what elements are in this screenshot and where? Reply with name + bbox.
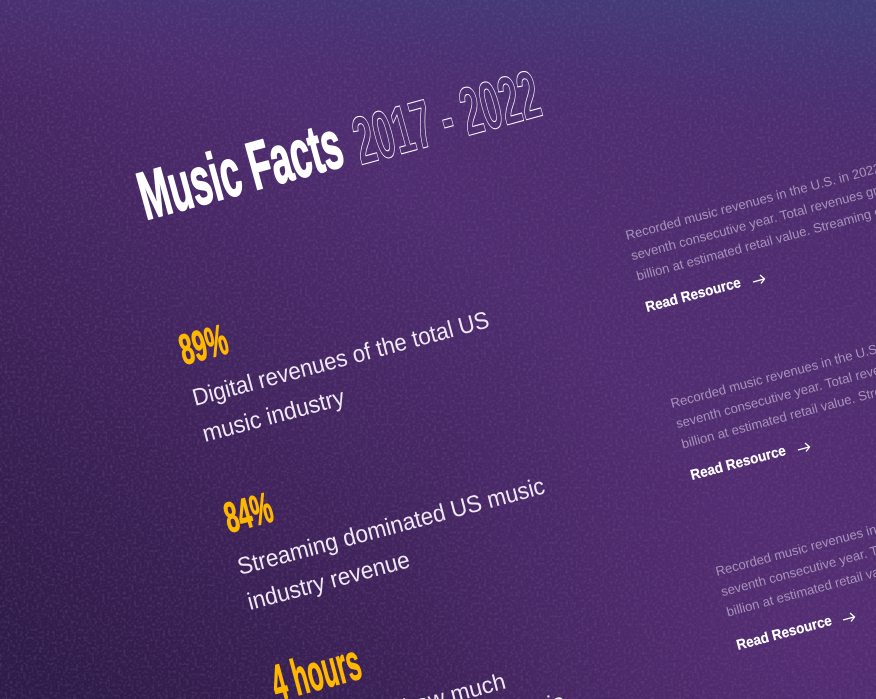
title: Music Facts: Music Facts — [130, 106, 351, 234]
icon: arrow — [798, 443, 810, 452]
read resource link: Read Resource — [689, 443, 788, 484]
fact description line 2: industry revenue — [245, 546, 413, 616]
resource 3 — [714, 476, 876, 654]
fact description: Digital revenues of the total US — [190, 307, 492, 412]
stat: 84%: 84% — [219, 484, 278, 543]
fact description: Streaming dominated US music — [235, 473, 548, 581]
icon: arrow — [843, 613, 854, 622]
resource 1 — [624, 140, 876, 316]
title: outlined years: 2017 - 2022 — [345, 56, 548, 179]
stat: 89%: 89% — [174, 316, 233, 375]
fact description line 2: music industry — [200, 384, 348, 448]
resource 2 — [669, 308, 876, 484]
read resource link: Read Resource — [644, 275, 743, 316]
read resource link: Read Resource — [735, 613, 834, 654]
icon: arrow — [753, 275, 764, 284]
fact: 84% — [219, 473, 548, 616]
fact: 89% — [174, 307, 492, 448]
title — [130, 56, 548, 234]
fact: 4 hours — [265, 633, 567, 699]
